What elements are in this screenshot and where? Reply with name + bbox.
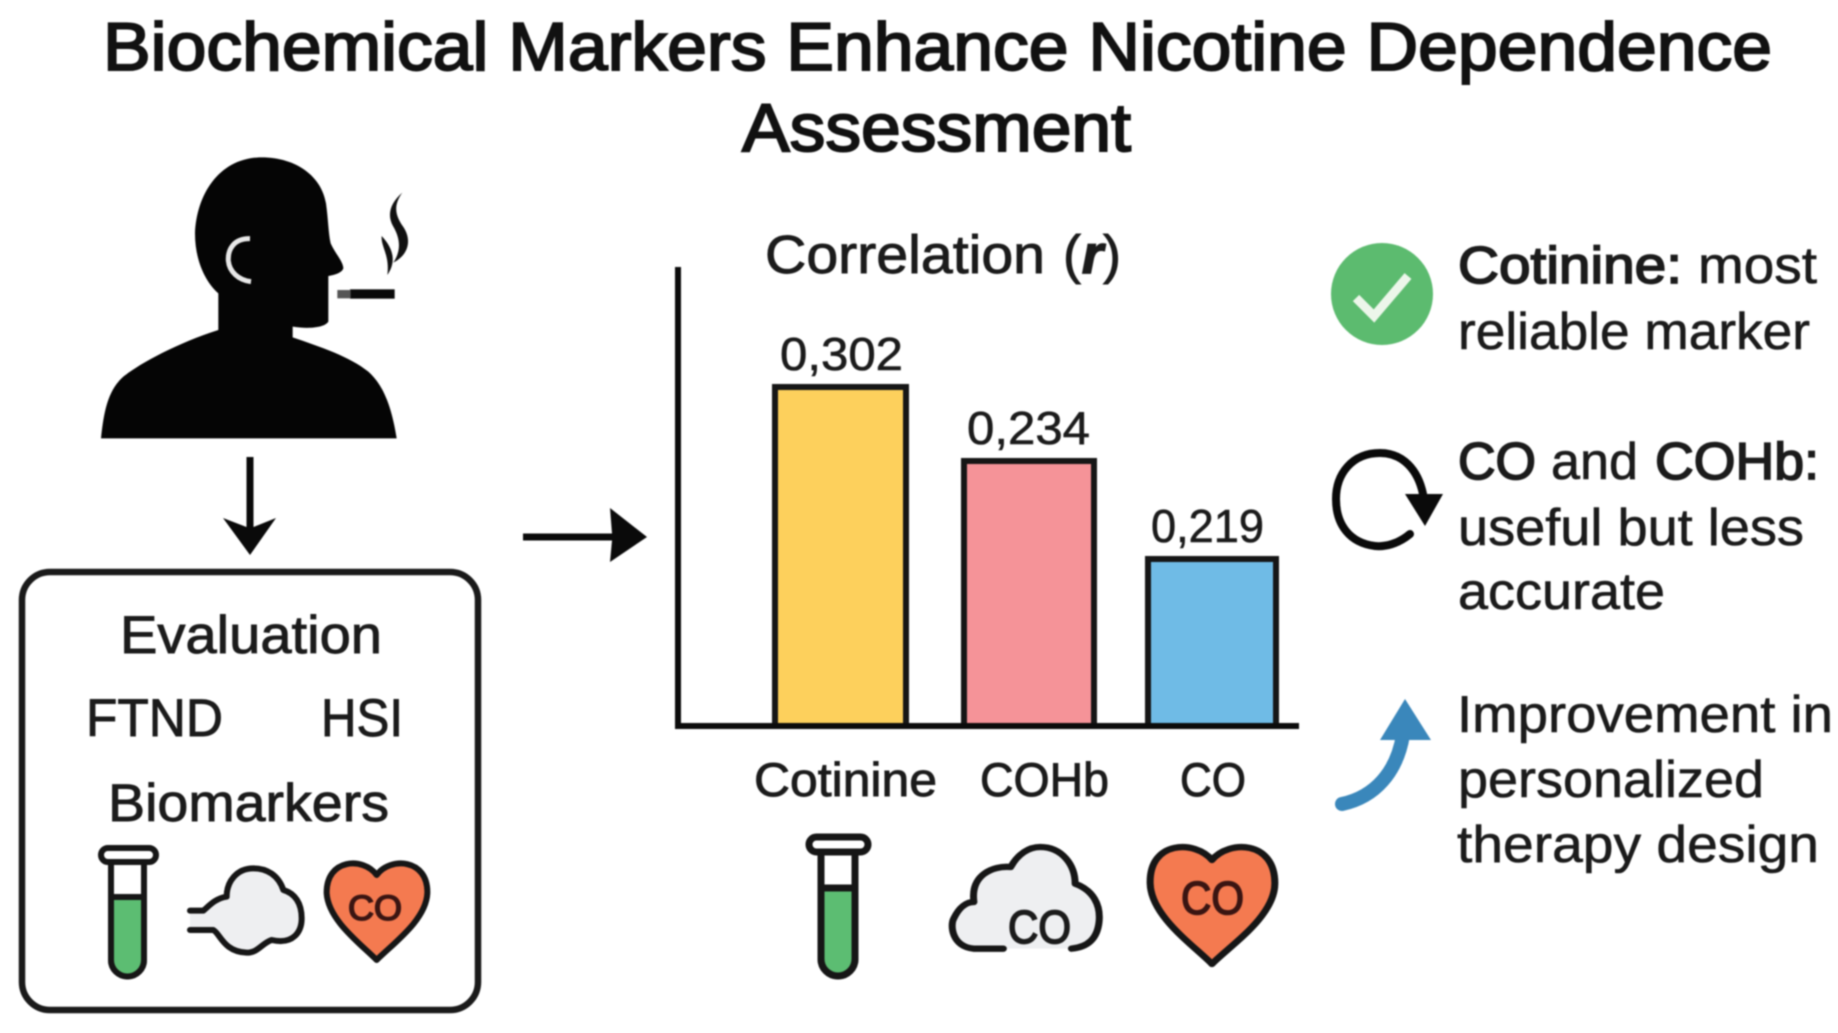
label: COHb: COHb <box>980 753 1109 806</box>
label: CO: CO <box>1180 753 1246 806</box>
takeaway: cotinine <box>1458 237 1818 361</box>
icon: CO heart small: CO <box>348 889 402 928</box>
takeaway: cotinine: most <box>1698 237 1818 295</box>
takeaway: therapy: Improvement in <box>1457 686 1833 744</box>
takeaway: CO and COHb: CO <box>1458 433 1536 491</box>
takeaway: CO and COHb <box>1458 433 1819 621</box>
icon: blue up arrow <box>1342 699 1431 804</box>
heading: evaluation: Evaluation <box>120 606 382 665</box>
chart title: ( <box>1063 225 1081 285</box>
icon: green check <box>1331 243 1433 345</box>
chart title: ) <box>1103 225 1121 285</box>
title <box>103 9 1772 166</box>
icon: smoker silhouette <box>101 157 408 438</box>
icon: cloud small <box>190 868 302 953</box>
title: Biochemical Markers Enhance Nicotine Dependence <box>103 9 1772 85</box>
smoke <box>382 193 408 275</box>
value: cotinine: 0,302 <box>780 328 903 380</box>
chart title: Correlation <box>765 225 1045 285</box>
takeaway: therapy <box>1457 686 1833 874</box>
takeaway: CO and COHb: accurate <box>1458 563 1665 621</box>
silhouette body <box>101 157 397 438</box>
cigarette filter <box>337 290 351 298</box>
title: Assessment <box>742 90 1131 166</box>
takeaway: CO and COHb: useful but less <box>1458 499 1804 557</box>
value: COHb: 0,234 <box>967 402 1090 454</box>
takeaway: cotinine: Cotinine: <box>1458 237 1682 295</box>
arrow: down to evaluation <box>223 457 276 555</box>
value: CO: 0,219 <box>1151 500 1264 552</box>
bar: COHb <box>964 461 1094 726</box>
icon: CO heart large <box>1150 847 1275 964</box>
bar: CO <box>1148 559 1276 726</box>
icon: CO heart large: CO <box>1181 872 1244 924</box>
panel: evaluation <box>22 572 478 1010</box>
icon: CO heart small <box>327 863 427 960</box>
icon: CO cloud large: CO <box>1008 901 1071 953</box>
label: FTND: FTND <box>86 689 223 748</box>
bar chart <box>678 225 1299 806</box>
label: biomarkers: Biomarkers <box>108 774 389 833</box>
axes <box>678 267 1299 726</box>
icon: CO cloud large <box>952 847 1099 953</box>
takeaway: CO and COHb: COHb: <box>1655 433 1819 491</box>
chart title: r <box>1082 225 1106 285</box>
icon: cycle arrow <box>1336 453 1443 546</box>
label: cotinine: Cotinine <box>754 753 937 806</box>
panel: takeaways <box>1331 237 1833 874</box>
takeaway: cotinine: reliable marker <box>1458 303 1810 361</box>
cigarette <box>350 289 395 299</box>
ear <box>228 239 251 282</box>
takeaway: therapy: therapy design <box>1457 816 1819 874</box>
takeaway: CO and COHb: and <box>1551 433 1638 491</box>
icon: test tube small <box>101 848 156 976</box>
arrow: to chart <box>523 508 647 562</box>
label: HSI: HSI <box>321 689 403 748</box>
icon: test tube large <box>809 837 868 976</box>
takeaway: therapy: personalized <box>1458 751 1764 809</box>
bar: cotinine <box>775 387 906 726</box>
